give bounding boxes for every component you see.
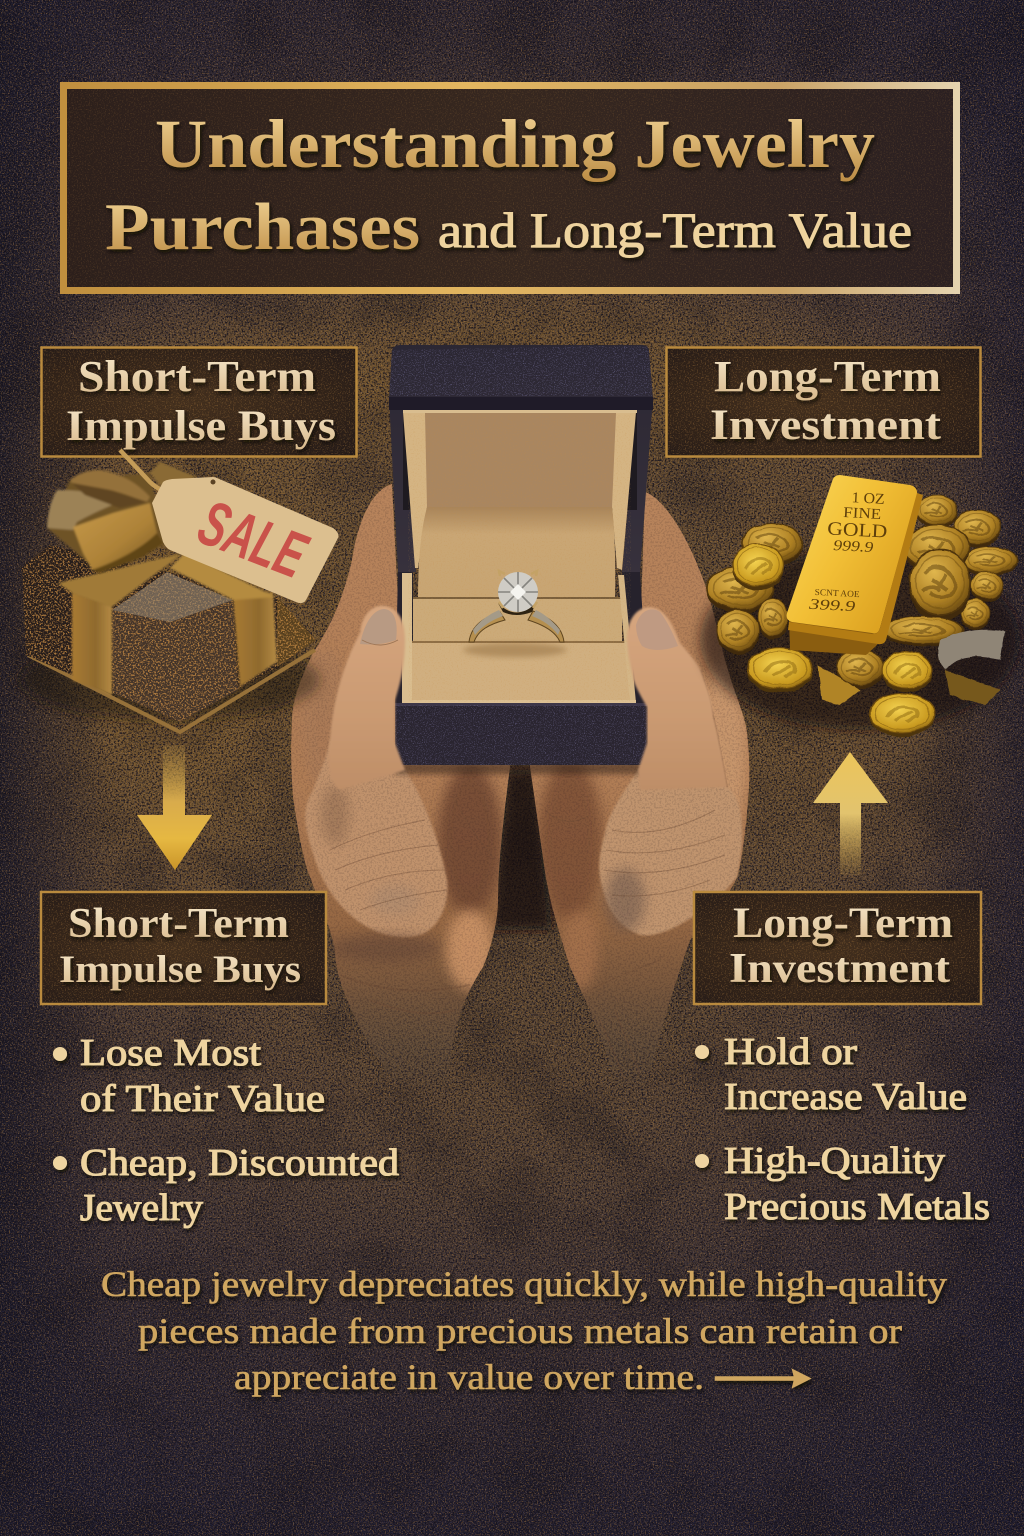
box interior [402,410,637,704]
heading: short-term lower: Short-Term [68,901,289,947]
text block: short-term bullets: of Their Value [80,1078,325,1120]
box base [395,703,648,765]
text block: short-term bullets: Cheap, Discounted [80,1142,399,1184]
sale tag: SALE [189,486,317,592]
title text: Purchases [105,190,420,264]
text block: summary: appreciate in value over time. [234,1357,704,1397]
heading: short-term lower [41,892,326,1004]
palm shading [301,650,747,990]
text block: summary [101,1264,947,1397]
gold bar: GOLD [827,518,888,543]
text block: long-term bullets [696,1031,990,1228]
title text: Understanding Jewelry [155,106,875,182]
text block: summary: Cheap jewelry depreciates quickly, while high-quality [101,1264,947,1304]
arrow: up [813,752,888,875]
heading: long-term top [666,348,980,456]
text block: long-term bullets: Hold or [724,1031,857,1073]
text block: short-term bullets: Lose Most [80,1032,261,1074]
heading: long-term top: Investment [710,402,942,449]
gold bar: 999.9 [833,538,874,556]
gold bar: 1 OZ [851,490,885,508]
heading: short-term lower: Impulse Buys [59,948,301,991]
heading: short-term top: Impulse Buys [66,403,336,450]
thumb mounds [305,740,742,962]
text block: short-term bullets: Jewelry [80,1187,203,1229]
heading: long-term lower: Investment [729,946,950,992]
heading: long-term lower: Long-Term [733,900,953,947]
box lid [389,345,653,572]
heading: short-term top [42,348,356,456]
icon: gold bar and coins [700,475,1020,736]
sale tag [120,450,338,603]
text block: short-term bullets [54,1032,399,1229]
gift ribbon [58,553,277,695]
text block: long-term bullets: Precious Metals [724,1186,990,1228]
diamond ring [469,571,564,642]
gold bar: 399.9 [807,597,856,615]
text block: long-term bullets: High-Quality [724,1140,945,1182]
text block: long-term bullets: Increase Value [724,1076,967,1118]
gift bow [47,462,197,573]
heading: long-term top: Long-Term [714,352,941,401]
heading: long-term lower [694,892,981,1004]
title panel [64,86,956,290]
gold bar: FINE [843,505,882,523]
text block: summary: pieces made from precious metals can retain or [138,1311,902,1351]
right thumb [627,607,727,790]
icon: gift box with sale tag [20,450,338,732]
title text: and Long-Term Value [438,202,912,258]
left thumb [328,606,405,790]
arrow: summary [715,1369,811,1388]
arrow: down [137,745,212,870]
heading: short-term top: Short-Term [78,352,316,401]
hand creases [330,670,727,1080]
hands holding box [280,470,770,1100]
coins pile [707,495,1017,736]
gold bar: SCNT AOE [814,587,860,599]
gold bar [787,475,923,655]
title text [105,106,912,264]
jewelry box [389,345,653,765]
